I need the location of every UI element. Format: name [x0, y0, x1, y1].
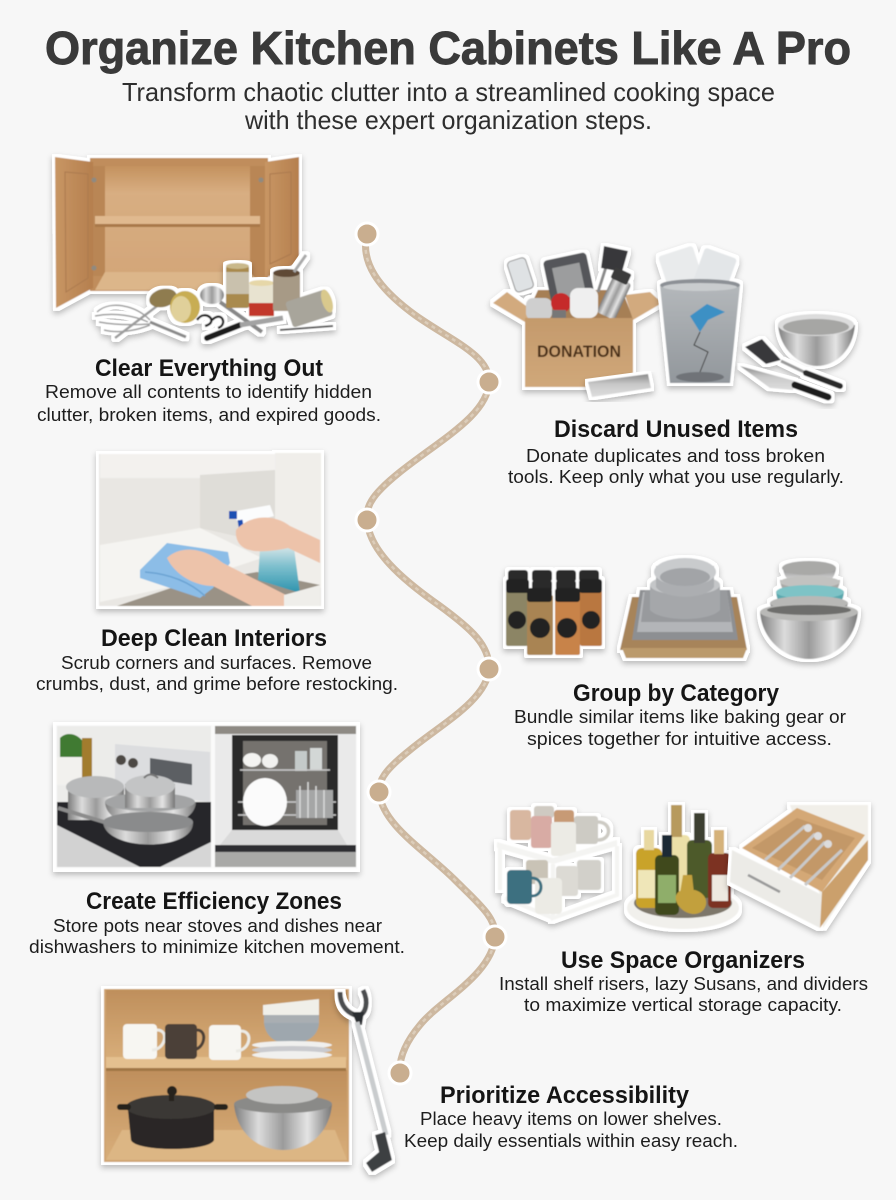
spice jars [506, 570, 602, 655]
dishwasher [215, 726, 356, 867]
caption: Clear Everything Out [37, 355, 381, 425]
nesting bowls [760, 561, 858, 659]
caption: Discard Unused Items: tools. Keep only what you use regularly. [508, 467, 844, 487]
steel bowl [778, 314, 855, 366]
wire trash bin with containers [658, 246, 740, 383]
organized cabinet [104, 989, 349, 1162]
caption: Use Space Organizers: Use Space Organizers [561, 947, 805, 974]
subtitle [122, 77, 775, 135]
illustration: shelf riser, lazy Susan, drawer divider [497, 805, 868, 929]
caption: Deep Clean Interiors: Scrub corners and surfaces. Remove [61, 653, 372, 673]
donation box: DONATION [537, 342, 621, 361]
caption: Clear Everything Out: Remove all contents to identify hidden [45, 382, 372, 402]
caption: Discard Unused Items [508, 416, 844, 487]
caption: Deep Clean Interiors: Deep Clean Interiors [101, 625, 327, 652]
winding rope path with step nodes [356, 223, 506, 1084]
caption: Clear Everything Out: Clear Everything Out [95, 355, 323, 382]
caption: Create Efficiency Zones [29, 888, 405, 957]
drawer with cutlery divider [730, 805, 868, 928]
spatula and knife [740, 339, 840, 397]
subtitle: Transform chaotic clutter into a streamlined cooking space [122, 77, 775, 107]
caption: Prioritize Accessibility: Keep daily essentials within easy reach. [404, 1131, 738, 1151]
cabinet [55, 157, 299, 308]
caption: Group by Category: spices together for intuitive access. [527, 729, 832, 749]
title: Organize Kitchen Cabinets Like A Pro [45, 22, 851, 74]
clutter of utensils and cans [95, 255, 335, 338]
subtitle: with these expert organization steps. [244, 105, 652, 135]
caption: Deep Clean Interiors [36, 625, 398, 694]
small metal tray [588, 374, 651, 397]
photo: hand cleaning a white shelf [99, 453, 321, 606]
caption: Use Space Organizers: Install shelf risers, lazy Susans, and dividers [499, 974, 868, 994]
illustration: emptied cabinet with clutter [55, 157, 335, 338]
illustration: organized cabinet with grabber tool [104, 989, 392, 1172]
lazy Susan with bottles [627, 805, 739, 929]
reach grabber tool [340, 990, 392, 1172]
caption: Discard Unused Items: Discard Unused Items [554, 416, 798, 443]
photo pair: pots on stove and loaded dishwasher [56, 725, 357, 869]
caption: Use Space Organizers: to maximize vertical storage capacity. [524, 995, 842, 1015]
caption: Discard Unused Items: Donate duplicates and toss broken [526, 446, 825, 466]
caption: Clear Everything Out: clutter, broken items, and expired goods. [37, 405, 381, 425]
stacked baking pans [620, 558, 747, 658]
caption: Prioritize Accessibility [404, 1082, 738, 1151]
caption: Group by Category: Group by Category [573, 680, 780, 707]
donation box [493, 246, 662, 387]
illustration: donation box, bin, discarded tools [493, 246, 855, 397]
caption: Group by Category [514, 680, 846, 749]
caption: Group by Category: Bundle similar items like baking gear or [514, 707, 846, 727]
caption: Create Efficiency Zones: Store pots near stoves and dishes near [53, 916, 382, 936]
caption: Create Efficiency Zones: Create Efficiency Zones [86, 888, 342, 915]
stove with pots [57, 726, 211, 867]
caption: Prioritize Accessibility: Place heavy items on lower shelves. [420, 1109, 722, 1129]
illustration: grouped spices, pans and bowls [506, 558, 858, 659]
shelf riser with mugs [497, 806, 617, 918]
caption: Prioritize Accessibility: Prioritize Accessibility [440, 1082, 690, 1109]
caption: Deep Clean Interiors: crumbs, dust, and grime before restocking. [36, 674, 398, 694]
caption: Create Efficiency Zones: dishwashers to minimize kitchen movement. [29, 937, 405, 957]
caption: Use Space Organizers [499, 947, 868, 1015]
